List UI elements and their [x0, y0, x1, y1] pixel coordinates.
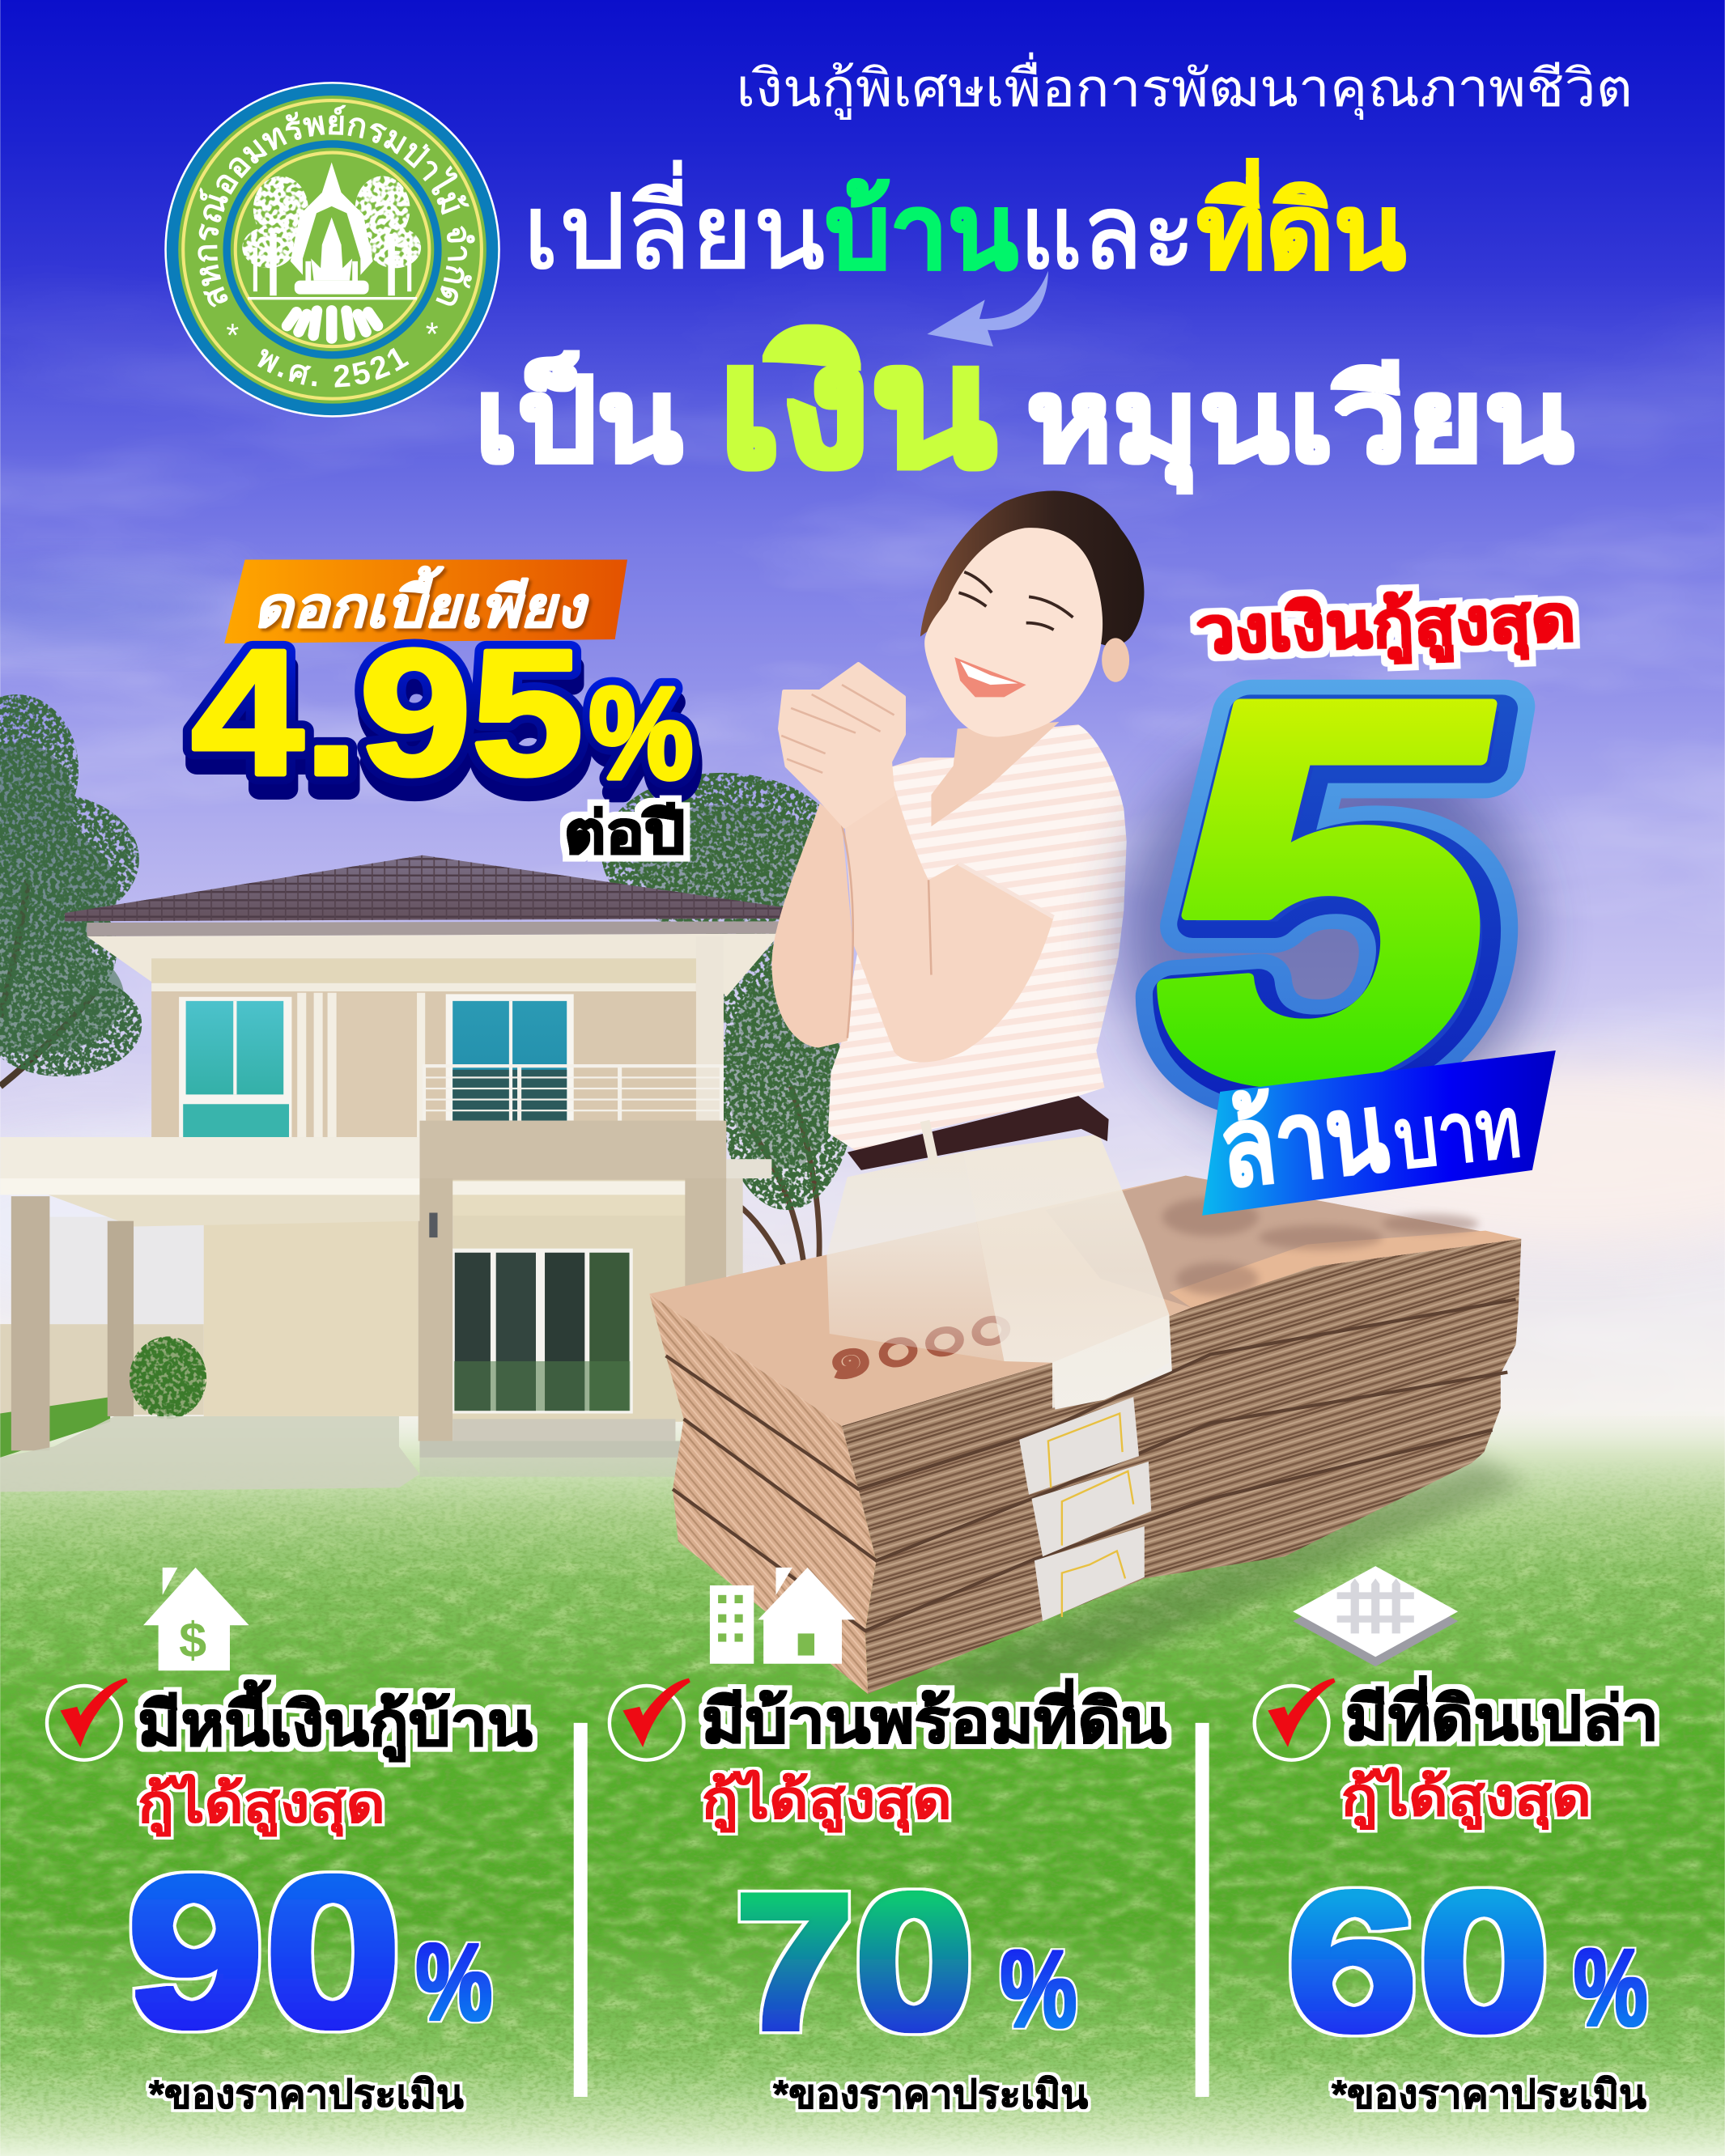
eyes and brows — [958, 572, 1073, 630]
pants left leg — [826, 1152, 1004, 1361]
percent sign: % — [1000, 1927, 1077, 2050]
divider one — [574, 1723, 588, 2097]
rate number: % — [588, 661, 694, 807]
ground wall — [204, 1221, 419, 1416]
note value: ๑๐๐๐ — [817, 1285, 1020, 1394]
condition label: มีที่ดินเปล่า — [1345, 1675, 1659, 1752]
money stack — [649, 1176, 1527, 1694]
steps — [452, 1419, 675, 1441]
face — [924, 528, 1103, 737]
rate number outline: % — [588, 661, 694, 807]
crest base line — [248, 297, 417, 299]
fence — [0, 1324, 204, 1415]
heading line one: บ้าน — [826, 174, 1018, 291]
percent sign: % — [415, 1920, 492, 2044]
badge text: ดอกเบี้ยเพียง — [253, 567, 589, 639]
per year: ต่อปี — [564, 800, 685, 865]
million baht banner — [1202, 1050, 1556, 1216]
hair — [920, 490, 1144, 647]
crest figure — [311, 217, 352, 281]
shirt — [828, 724, 1127, 1152]
heading line one: ที่ดิน — [1196, 159, 1406, 291]
woman — [771, 490, 1169, 1408]
arm crease — [842, 825, 931, 1038]
left window — [179, 997, 291, 1137]
wall lamps — [429, 1212, 438, 1237]
lower backdrop sky — [49, 1217, 204, 1324]
footnote: *ของราคาประเมิน — [773, 2073, 1088, 2117]
column one — [47, 1568, 533, 2117]
logo stars: * — [226, 316, 239, 354]
icon: house with dollar — [143, 1568, 249, 1670]
soffit — [87, 934, 780, 997]
glow — [1121, 728, 1534, 1141]
tree left — [0, 694, 142, 1086]
crest fan — [279, 304, 385, 344]
heading line one — [523, 159, 1406, 291]
door glass — [452, 1249, 633, 1414]
ear — [1102, 638, 1129, 682]
max loan label: กู้ได้สูงสุด — [1341, 1767, 1591, 1831]
bundle separations — [666, 1300, 1516, 1631]
rate number outline: 4.95 — [191, 613, 584, 813]
rate number extrusion — [194, 627, 696, 827]
heading line one: และ — [1019, 174, 1196, 291]
rate number outline — [191, 613, 694, 813]
smile — [954, 657, 1026, 697]
interest rate badge — [191, 559, 696, 865]
right arm — [844, 771, 1054, 1062]
grass field — [0, 1409, 1725, 2156]
rate number: 4.95 — [191, 613, 584, 813]
right window — [446, 994, 574, 1121]
crest trees — [242, 176, 421, 268]
heading line two — [474, 312, 1574, 500]
heading line one: เปลี่ยน — [523, 160, 826, 291]
house — [0, 855, 785, 1492]
percent value: 70 — [734, 1855, 974, 2069]
stack top — [649, 1176, 1521, 1426]
check mark — [1255, 1680, 1334, 1760]
max loan label: กู้ได้สูงสุด — [138, 1773, 385, 1837]
teeth — [960, 661, 1018, 685]
divider two — [1196, 1723, 1209, 2097]
banner text: ล้าน — [1213, 1070, 1394, 1210]
driveway — [0, 1416, 419, 1492]
heading line two: เป็น — [474, 351, 682, 486]
pants right leg — [963, 1135, 1169, 1408]
curved arrow — [927, 271, 1048, 346]
hands — [780, 664, 903, 826]
top subtitle: เงินกู้พิเศษเพื่อการพัฒนาคุณภาพชีวิต — [736, 53, 1633, 121]
fascia — [87, 921, 783, 936]
five outer: 5 — [1115, 594, 1561, 1201]
neck — [931, 722, 1059, 826]
porch slab — [0, 1137, 419, 1178]
columns — [11, 1196, 49, 1450]
roof — [65, 855, 785, 921]
shadow — [867, 1458, 1527, 1694]
fingers — [781, 685, 894, 773]
tree behind house — [601, 773, 856, 1272]
logo year: พ.ศ. 2521 — [257, 348, 410, 388]
column two — [610, 1568, 1166, 2117]
five face: 5 — [1107, 588, 1553, 1194]
check mark — [610, 1680, 689, 1760]
sleeve hem — [958, 864, 1054, 917]
percent value: 90 — [127, 1833, 402, 2071]
five mid: 5 — [1115, 594, 1561, 1201]
percent value: 60 — [1286, 1853, 1550, 2072]
icon: house with dollar: $ — [179, 1612, 206, 1667]
left arm — [771, 803, 853, 1048]
upper wall — [151, 958, 724, 1137]
condition label: มีหนี้เงินกู้บ้าน — [138, 1679, 533, 1762]
max loan label: กู้ได้สูงสุด — [702, 1769, 952, 1833]
stack left face — [649, 1294, 876, 1694]
max loan heading: วงเงินกู้สูงสุด — [1195, 582, 1577, 671]
logo crest — [242, 162, 421, 344]
rate number extrusion: 4.95 — [194, 627, 586, 827]
banknote portrait — [1162, 1198, 1479, 1295]
siding panel — [337, 993, 417, 1137]
big five — [1107, 588, 1561, 1201]
stack side — [842, 1239, 1521, 1694]
shrub — [130, 1336, 206, 1419]
banner unit: บาท — [1390, 1080, 1525, 1187]
column three — [1255, 1566, 1659, 2117]
band marks — [1048, 1414, 1133, 1617]
icon: land plot — [1293, 1566, 1458, 1666]
logo — [164, 82, 500, 418]
percent sign: % — [1574, 1926, 1648, 2049]
right block — [419, 1121, 726, 1182]
heading line two: เงิน — [718, 312, 996, 500]
footnote: *ของราคาประเมิน — [1332, 2073, 1646, 2117]
lawn strip — [0, 1397, 110, 1458]
heading line two: หมุนเวียน — [1026, 357, 1574, 493]
badge background — [224, 559, 627, 643]
logo ring text: สหกรณ์ออมทรัพย์กรมป่าไม้ จำกัด — [198, 105, 475, 308]
rate number extrusion: % — [592, 675, 696, 821]
logo stars — [226, 315, 439, 354]
crest arch — [291, 162, 373, 275]
rate number — [191, 613, 694, 813]
check mark — [47, 1680, 127, 1760]
condition label: มีบ้านพร้อมที่ดิน — [702, 1679, 1166, 1755]
icon: building and house — [710, 1568, 856, 1664]
belt — [848, 1096, 1109, 1170]
logo stars: * — [426, 315, 439, 352]
right pillar — [696, 936, 724, 1121]
balcony rail — [423, 1064, 724, 1122]
paper bands — [1019, 1314, 1172, 1621]
footnote: *ของราคาประเมิน — [149, 2073, 464, 2117]
